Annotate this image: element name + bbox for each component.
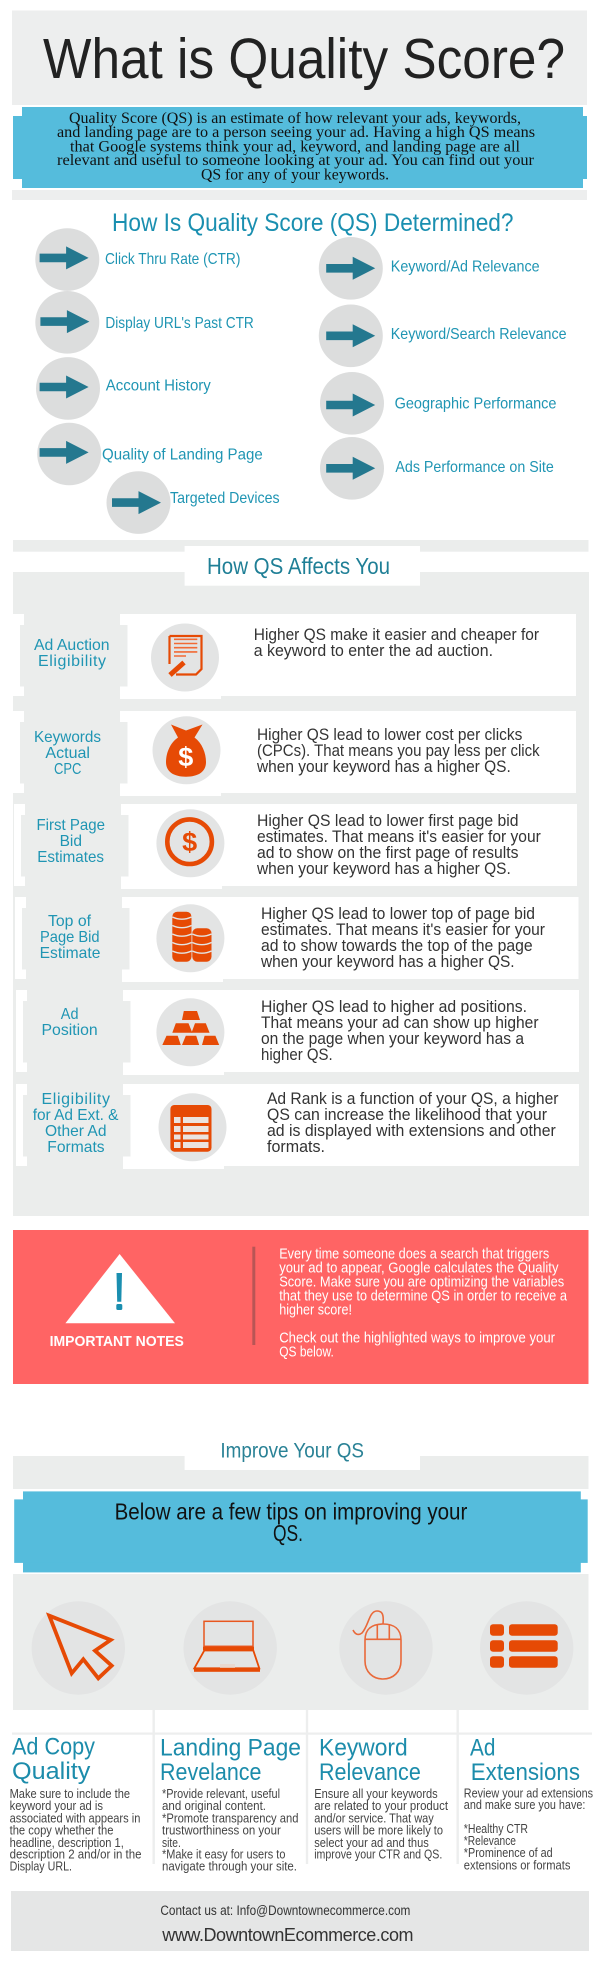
row: top of page bid estimate: Higher QS lead to lower top of page bid bbox=[261, 904, 535, 923]
column: ad extensions: Extensions bbox=[471, 1759, 580, 1786]
row: ad position: Position bbox=[42, 1022, 98, 1039]
icon: dollar coin bbox=[167, 819, 212, 864]
icon: money bag: $ bbox=[178, 742, 193, 772]
row: first page bid estimates: estimates. That means it's easier for your bbox=[257, 827, 541, 846]
factor: click thru rate: Click Thru Rate (CTR) bbox=[105, 251, 240, 268]
column: ad copy quality: Display URL. bbox=[10, 1858, 72, 1874]
notes text: higher score! bbox=[279, 1301, 352, 1318]
column: landing page relevance: Revelance bbox=[160, 1759, 262, 1786]
row: ad auction eligibility: Ad Auction bbox=[34, 637, 110, 654]
intro band: and landing page are to a person seeing your ad. Having a high QS means bbox=[57, 124, 535, 141]
footer: contact bbox=[11, 1891, 589, 1951]
factor: keyword/search relevance bbox=[319, 304, 567, 367]
icon: dollar coin: $ bbox=[182, 827, 197, 857]
row: top of page bid estimate: Page Bid bbox=[40, 929, 100, 946]
notes text: your ad to appear, Google calculates the Quality bbox=[279, 1259, 559, 1276]
panel: important notes: IMPORTANT NOTES bbox=[50, 1334, 184, 1350]
intro band: that Google systems think your ad, keyword, and landing page are all bbox=[70, 138, 521, 155]
column: keyword relevance: Ensure all your keywords bbox=[314, 1786, 438, 1801]
row: ad auction eligibility bbox=[13, 613, 576, 700]
row: keywords actual CPC: (CPCs). That means you pay less per click bbox=[257, 741, 540, 760]
factor: targeted devices: Targeted Devices bbox=[170, 490, 280, 507]
column: ad copy quality: Quality bbox=[12, 1758, 90, 1785]
column: landing page relevance: and original content. bbox=[162, 1798, 266, 1813]
panel: improve your QS bbox=[10, 1439, 593, 1874]
row: ad auction eligibility: a keyword to enter the ad auction. bbox=[254, 641, 493, 660]
intro band bbox=[13, 107, 587, 188]
column: ad copy quality: Ad Copy bbox=[12, 1734, 95, 1760]
factor: geographic performance bbox=[320, 372, 557, 435]
row: eligibility for ad extensions: Eligibility bbox=[42, 1091, 110, 1108]
column: keyword relevance: users will be more likely to bbox=[314, 1823, 443, 1838]
column: ad copy quality: the copy whether the bbox=[10, 1823, 114, 1838]
column: ad copy quality: associated with appears in bbox=[10, 1810, 140, 1825]
footer: contact: Contact us at: Info@Downtownecommerce.com bbox=[160, 1903, 410, 1918]
factor: account history: Account History bbox=[106, 377, 211, 394]
factor: keyword/search relevance: Keyword/Search Relevance bbox=[391, 326, 567, 343]
row: ad position: Ad bbox=[61, 1006, 78, 1023]
row: top of page bid estimate: ad to show towards the top of the page bbox=[261, 936, 533, 955]
row: top of page bid estimate: Estimate bbox=[40, 945, 100, 962]
row: top of page bid estimate: Top of bbox=[48, 913, 92, 930]
column: keyword relevance: are related to your product bbox=[314, 1798, 448, 1813]
column: ad copy quality: keyword your ad is bbox=[10, 1798, 103, 1813]
row: ad position: Higher QS lead to higher ad positions. bbox=[261, 997, 527, 1016]
row: keywords actual CPC: Keywords bbox=[34, 729, 101, 746]
icon: document and pencil bbox=[170, 636, 202, 675]
column: keyword relevance: improve your CTR and QS. bbox=[314, 1846, 442, 1861]
factor: quality of landing page bbox=[37, 423, 263, 485]
column: ad copy quality bbox=[10, 1734, 141, 1874]
row: top of page bid estimate: when your keyword has a higher QS. bbox=[260, 952, 515, 971]
column: ad extensions: *Healthy CTR bbox=[464, 1821, 528, 1836]
icon: table bbox=[170, 1105, 212, 1152]
column: keyword relevance bbox=[314, 1734, 448, 1861]
column: ad copy quality: description 2 and/or in the bbox=[10, 1846, 141, 1861]
icon: laptop bbox=[194, 1621, 260, 1672]
factor: account history bbox=[36, 357, 211, 420]
heading: how QS is determined: How Is Quality Score (QS) Determined? bbox=[112, 210, 514, 237]
row: eligibility for ad extensions: for Ad Ext. & bbox=[33, 1107, 119, 1124]
notes text: QS below. bbox=[279, 1343, 334, 1360]
row: eligibility for ad extensions: Ad Rank is a function of your QS, a higher bbox=[267, 1089, 559, 1108]
column: landing page relevance: *Make it easy for users to bbox=[162, 1846, 285, 1861]
row: eligibility for ad extensions: Formats bbox=[47, 1139, 105, 1156]
row: keywords actual CPC bbox=[13, 710, 576, 797]
column: landing page relevance: *Promote transparency and bbox=[162, 1810, 298, 1825]
column: keyword relevance: and/or service. That way bbox=[314, 1810, 434, 1825]
factor: keyword/ad relevance: Keyword/Ad Relevance bbox=[391, 259, 540, 276]
intro band: relevant and useful to someone looking at your ad. You can find out your bbox=[57, 152, 535, 169]
row: eligibility for ad extensions bbox=[16, 1083, 579, 1170]
column: landing page relevance bbox=[160, 1734, 301, 1874]
icon: coin stacks bbox=[172, 912, 212, 962]
row: ad position: That means your ad can show up higher bbox=[261, 1013, 539, 1032]
icon: computer mouse bbox=[353, 1611, 401, 1679]
tips band: QS. bbox=[273, 1520, 303, 1546]
column: ad extensions bbox=[464, 1734, 593, 1872]
icon: gold bars bbox=[162, 1011, 219, 1045]
column: ad copy quality: Make sure to include the bbox=[10, 1786, 130, 1801]
column: ad extensions: *Relevance bbox=[464, 1833, 516, 1848]
footer: contact: www.DowntownEcommerce.com bbox=[161, 1925, 414, 1945]
factor: display URL past CTR bbox=[35, 291, 254, 354]
notes text bbox=[279, 1245, 568, 1360]
row: keywords actual CPC: when your keyword has a higher QS. bbox=[256, 757, 511, 776]
row: eligibility for ad extensions: formats. bbox=[267, 1137, 325, 1156]
row: first page bid estimates: ad to show on the first page of results bbox=[257, 843, 518, 862]
intro band: QS for any of your keywords. bbox=[201, 166, 389, 183]
factor: display URL past CTR: Display URL's Past CTR bbox=[105, 315, 254, 332]
notes text: Every time someone does a search that triggers bbox=[279, 1245, 549, 1262]
heading: improve your QS: Improve Your QS bbox=[220, 1439, 364, 1462]
column: landing page relevance: Landing Page bbox=[160, 1734, 301, 1762]
tips band: Below are a few tips on improving your bbox=[115, 1498, 468, 1524]
factor: ads performance on site bbox=[320, 437, 554, 500]
factor: geographic performance: Geographic Performance bbox=[395, 395, 557, 412]
row: ad auction eligibility: Higher QS make it easier and cheaper for bbox=[254, 625, 539, 644]
icon: warning triangle bbox=[65, 1254, 175, 1323]
icon: cursor bbox=[49, 1616, 112, 1678]
icon: money bag bbox=[166, 724, 206, 777]
column: landing page relevance: site. bbox=[162, 1835, 181, 1850]
row: first page bid estimates: Higher QS lead to lower first page bid bbox=[257, 811, 518, 830]
factor: quality of landing page: Quality of Landing Page bbox=[102, 447, 263, 464]
row: top of page bid estimate: estimates. That means it's easier for your bbox=[261, 920, 545, 939]
row: keywords actual CPC: CPC bbox=[54, 761, 81, 778]
row: first page bid estimates: when your keyword has a higher QS. bbox=[256, 859, 511, 878]
panel: important notes bbox=[13, 1230, 588, 1384]
intro band: Quality Score (QS) is an estimate of how relevant your ads, keywords, bbox=[69, 110, 521, 127]
row: top of page bid estimate bbox=[15, 896, 578, 983]
row: ad auction eligibility: Eligibility bbox=[38, 653, 106, 670]
row: eligibility for ad extensions: ad is displayed with extensions and other bbox=[267, 1121, 556, 1140]
factor: targeted devices bbox=[106, 471, 280, 534]
heading: how QS affects you: How QS Affects You bbox=[207, 553, 390, 579]
row: first page bid estimates: First Page bbox=[36, 817, 105, 834]
row: ad position bbox=[16, 989, 579, 1076]
column: landing page relevance: trustworthiness on your bbox=[162, 1823, 281, 1838]
row: keywords actual CPC: Actual bbox=[45, 745, 90, 762]
row: keywords actual CPC: Higher QS lead to lower cost per clicks bbox=[257, 725, 522, 744]
column: keyword relevance: select your ad and thus bbox=[314, 1835, 429, 1850]
factor: keyword/ad relevance bbox=[319, 237, 540, 300]
tips band bbox=[14, 1491, 588, 1572]
row: eligibility for ad extensions: Other Ad bbox=[45, 1123, 106, 1140]
row: ad position: higher QS. bbox=[261, 1045, 333, 1064]
panel: how QS affects you bbox=[13, 540, 589, 1216]
panel: title header bbox=[12, 10, 587, 200]
icon: list bbox=[490, 1624, 558, 1668]
factor: ads performance on site: Ads Performance on Site bbox=[395, 459, 554, 476]
column: landing page relevance: navigate through your site. bbox=[162, 1858, 297, 1874]
column: ad copy quality: headline, description 1, bbox=[10, 1835, 124, 1850]
column: keyword relevance: Relevance bbox=[319, 1759, 421, 1786]
column: landing page relevance: *Provide relevant, useful bbox=[162, 1786, 280, 1801]
row: first page bid estimates bbox=[14, 803, 577, 890]
column: ad extensions: Ad bbox=[470, 1734, 495, 1762]
row: first page bid estimates: Bid bbox=[60, 833, 82, 850]
column: ad extensions: extensions or formats bbox=[464, 1858, 571, 1872]
column: ad extensions: *Prominence of ad bbox=[464, 1845, 553, 1860]
column: keyword relevance: Keyword bbox=[319, 1734, 408, 1762]
factor: click thru rate bbox=[35, 228, 240, 291]
notes text: Check out the highlighted ways to improve your bbox=[279, 1329, 555, 1346]
row: eligibility for ad extensions: QS can increase the likelihood that your bbox=[267, 1105, 547, 1124]
row: first page bid estimates: Estimates bbox=[37, 849, 104, 866]
row: ad position: on the page when your keyword has a bbox=[261, 1029, 524, 1048]
